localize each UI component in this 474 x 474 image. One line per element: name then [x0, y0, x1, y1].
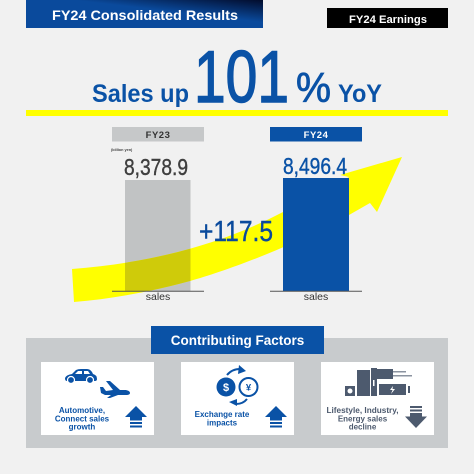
- icon: airplane: [100, 381, 130, 398]
- icon: car: [65, 369, 97, 384]
- overlap: arrow over FY23 bar: [125, 248, 190, 291]
- headline: Sales up 101% YoY: Sales up: [92, 80, 189, 108]
- label: FY24: FY24: [304, 130, 329, 141]
- caption: Lifestyle, Industry, Energy sales decline: decline: [349, 422, 377, 432]
- label: FY23: [112, 127, 204, 142]
- badge: FY24 Earnings: FY24 Earnings: [349, 14, 427, 26]
- header: FY24 Consolidated Results: [26, 0, 263, 28]
- label: FY24: [270, 127, 362, 142]
- label: FY23: FY23: [146, 130, 170, 141]
- headline: Sales up 101% YoY: YoY: [338, 80, 382, 108]
- panel: contributing factors: [26, 326, 448, 448]
- caption: Exchange rate impacts: impacts: [207, 418, 238, 428]
- caption: Lifestyle, Industry, Energy sales decline: Lifestyle, Industry,: [326, 406, 398, 415]
- arrow: rising yellow trend: [72, 157, 402, 302]
- value: 8,378.9: 8,378.9: [124, 154, 188, 180]
- bar: FY24 sales: [283, 178, 349, 291]
- caption: Lifestyle, Industry, Energy sales decline: Energy sales: [338, 414, 388, 424]
- axis line: FY24: [270, 290, 362, 292]
- icon: down arrow: [405, 406, 427, 428]
- icon: currency exchange: ¥: [246, 382, 252, 394]
- value: +117.5: +117.5: [199, 216, 273, 248]
- yellow divider band: [26, 110, 448, 116]
- bar: FY23 sales: [125, 180, 190, 291]
- caption: Automotive, Connect sales growth: Automotive,: [59, 406, 105, 415]
- headline: Sales up 101% YoY: [92, 37, 382, 118]
- heading: Contributing Factors: Contributing Factors: [171, 333, 304, 348]
- icon: appliances and battery: [345, 368, 412, 396]
- axis label: sales FY23: sales: [146, 291, 170, 303]
- value: 8,496.4: 8,496.4: [283, 153, 347, 179]
- icon: up arrow: [265, 406, 287, 428]
- card: exchange rate: [181, 362, 294, 435]
- headline: Sales up 101% YoY: 101: [194, 37, 289, 118]
- unit note: billion yen: (billion yen): [111, 148, 133, 152]
- headline: Sales up 101% YoY: %: [296, 64, 331, 111]
- header: FY24 Consolidated Results: FY24 Consolidated Results: [52, 7, 238, 23]
- badge: FY24 Earnings: [327, 8, 448, 28]
- card: lifestyle, industry, energy: [321, 362, 434, 435]
- caption: Automotive, Connect sales growth: growth: [69, 422, 95, 432]
- icon: currency exchange: $: [223, 382, 229, 394]
- icon: currency exchange: [216, 365, 258, 406]
- heading: Contributing Factors: [151, 326, 324, 354]
- axis line: FY23: [112, 290, 204, 292]
- caption: Automotive, Connect sales growth: Connect sales: [55, 414, 110, 424]
- icon: up arrow: [125, 406, 147, 428]
- card: automotive: [41, 362, 154, 435]
- axis label: sales FY24: sales: [304, 291, 328, 303]
- caption: Exchange rate impacts: Exchange rate: [195, 410, 250, 419]
